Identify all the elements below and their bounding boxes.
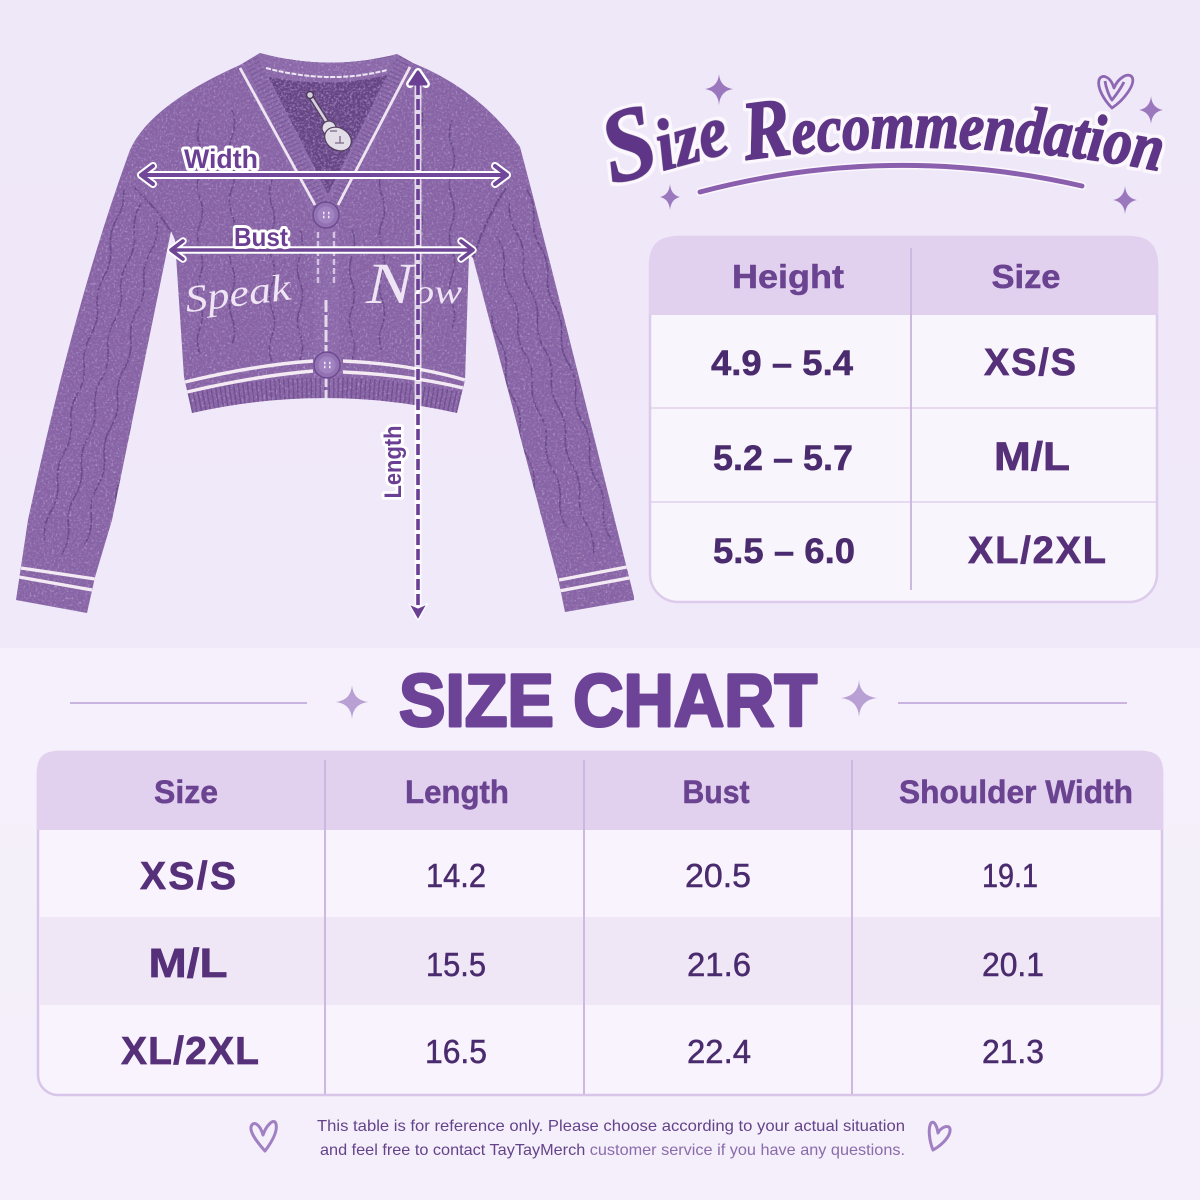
- row: M/L: 21.6: [687, 946, 751, 983]
- header: size: Size: [992, 258, 1060, 295]
- title text: size: Size: [588, 63, 738, 206]
- row: 5.2 to 5.7: 5.2 – 5.7: [713, 439, 853, 478]
- cardigan photo with measurement guides: [0, 40, 650, 630]
- row: XL/2XL: XL/2XL: [121, 1030, 259, 1073]
- right sleeve cables: [491, 188, 612, 554]
- row: 4.9 to 5.4: [711, 342, 1076, 384]
- column dividers: [325, 760, 852, 1094]
- hem rib lines: [190, 388, 459, 403]
- footer line 2: and feel free to contact TayTayMerch customer service if you have any questions.: [320, 1142, 905, 1159]
- row: XS/S: 20.5: [685, 857, 751, 894]
- rule left: [70, 702, 307, 704]
- icon: heart left: [251, 1122, 276, 1151]
- table card: [650, 237, 1157, 602]
- row: M/L: M/L: [148, 940, 228, 986]
- embroidered script text: N ow: [365, 251, 462, 316]
- row: M/L: 15.5: [426, 946, 486, 983]
- shaded middle row: [39, 917, 1161, 1005]
- row: M/L: [148, 940, 1044, 986]
- row: XS/S: 14.2: [426, 857, 486, 894]
- row: XS/S: [140, 855, 1038, 898]
- left sleeve cables: [44, 189, 158, 554]
- buttons: [313, 202, 340, 378]
- arrow: bust: [171, 241, 473, 259]
- header: height: Height: [732, 258, 844, 295]
- header band: [37, 751, 1163, 830]
- row: XL/2XL: [121, 1030, 1044, 1073]
- guitar patch: [306, 92, 356, 156]
- table: size chart: [37, 751, 1163, 1095]
- row: 5.5 to 6.0: XL/2XL: [968, 530, 1106, 572]
- cuff stripes: [19, 568, 95, 590]
- row: 4.9 to 5.4: XS/S: [984, 342, 1076, 384]
- row: XL/2XL: 21.3: [982, 1033, 1044, 1070]
- title text: recommendation: Recommendation: [742, 98, 1166, 174]
- band rib lines: [251, 58, 404, 205]
- row: 5.5 to 6.0: [713, 530, 1106, 572]
- title underline swoosh: [700, 165, 1082, 192]
- table card: [38, 752, 1162, 1095]
- title text: SIZE CHART: [399, 659, 817, 742]
- sparkle right: [841, 680, 877, 717]
- hem stripes: [185, 361, 465, 392]
- row: XS/S: XS/S: [140, 855, 236, 898]
- row: XL/2XL: 16.5: [425, 1033, 487, 1070]
- header row: Shoulder Width: [899, 774, 1133, 810]
- cardigan garment: [0, 40, 650, 630]
- header row: Bust: [682, 774, 750, 810]
- collar back rib: [256, 53, 400, 83]
- row: 5.2 to 5.7: [713, 435, 1070, 479]
- row: XL/2XL: 22.4: [687, 1033, 751, 1070]
- footer note: [251, 1118, 950, 1159]
- placket bands: [240, 53, 413, 400]
- label: width: Width: [184, 144, 258, 174]
- background: top section: [0, 0, 1200, 648]
- row: XS/S: 19.1: [982, 857, 1038, 894]
- header row: Length: [405, 774, 509, 810]
- heading: size recommendation: [588, 63, 1166, 214]
- table header band: [649, 236, 1158, 315]
- embroidered script text: Speak: [183, 266, 294, 321]
- body cables: [135, 105, 506, 362]
- label: bust: Bust: [234, 222, 288, 252]
- label: length: Length: [380, 426, 407, 498]
- header row: Size: [154, 774, 218, 810]
- icon: heart: [1099, 75, 1133, 108]
- header row: [154, 774, 1133, 810]
- heading: size chart: [70, 659, 1127, 742]
- sparkles around title: [660, 74, 1163, 214]
- row: M/L: 20.1: [982, 946, 1044, 983]
- sparkle left: [336, 685, 368, 719]
- embroidered script text: [183, 251, 462, 321]
- knit texture overlay: [16, 54, 634, 612]
- row: 5.2 to 5.7: M/L: [994, 435, 1070, 479]
- arrow: length: [409, 72, 427, 620]
- collar and band stripes: [266, 68, 387, 77]
- table: height to size recommendation: [649, 236, 1158, 602]
- row dividers: [651, 408, 1156, 502]
- row: 4.9 to 5.4: 4.9 – 5.4: [711, 344, 854, 383]
- row: 5.5 to 6.0: 5.5 – 6.0: [713, 532, 855, 571]
- rule right: [898, 702, 1127, 704]
- neck interior: [268, 56, 391, 194]
- arrow: width: [141, 166, 507, 184]
- footer line 1: This table is for reference only. Please choose according to your actual situation: [317, 1118, 905, 1135]
- background: bottom section: [0, 648, 1200, 1200]
- icon: heart right: [929, 1122, 950, 1150]
